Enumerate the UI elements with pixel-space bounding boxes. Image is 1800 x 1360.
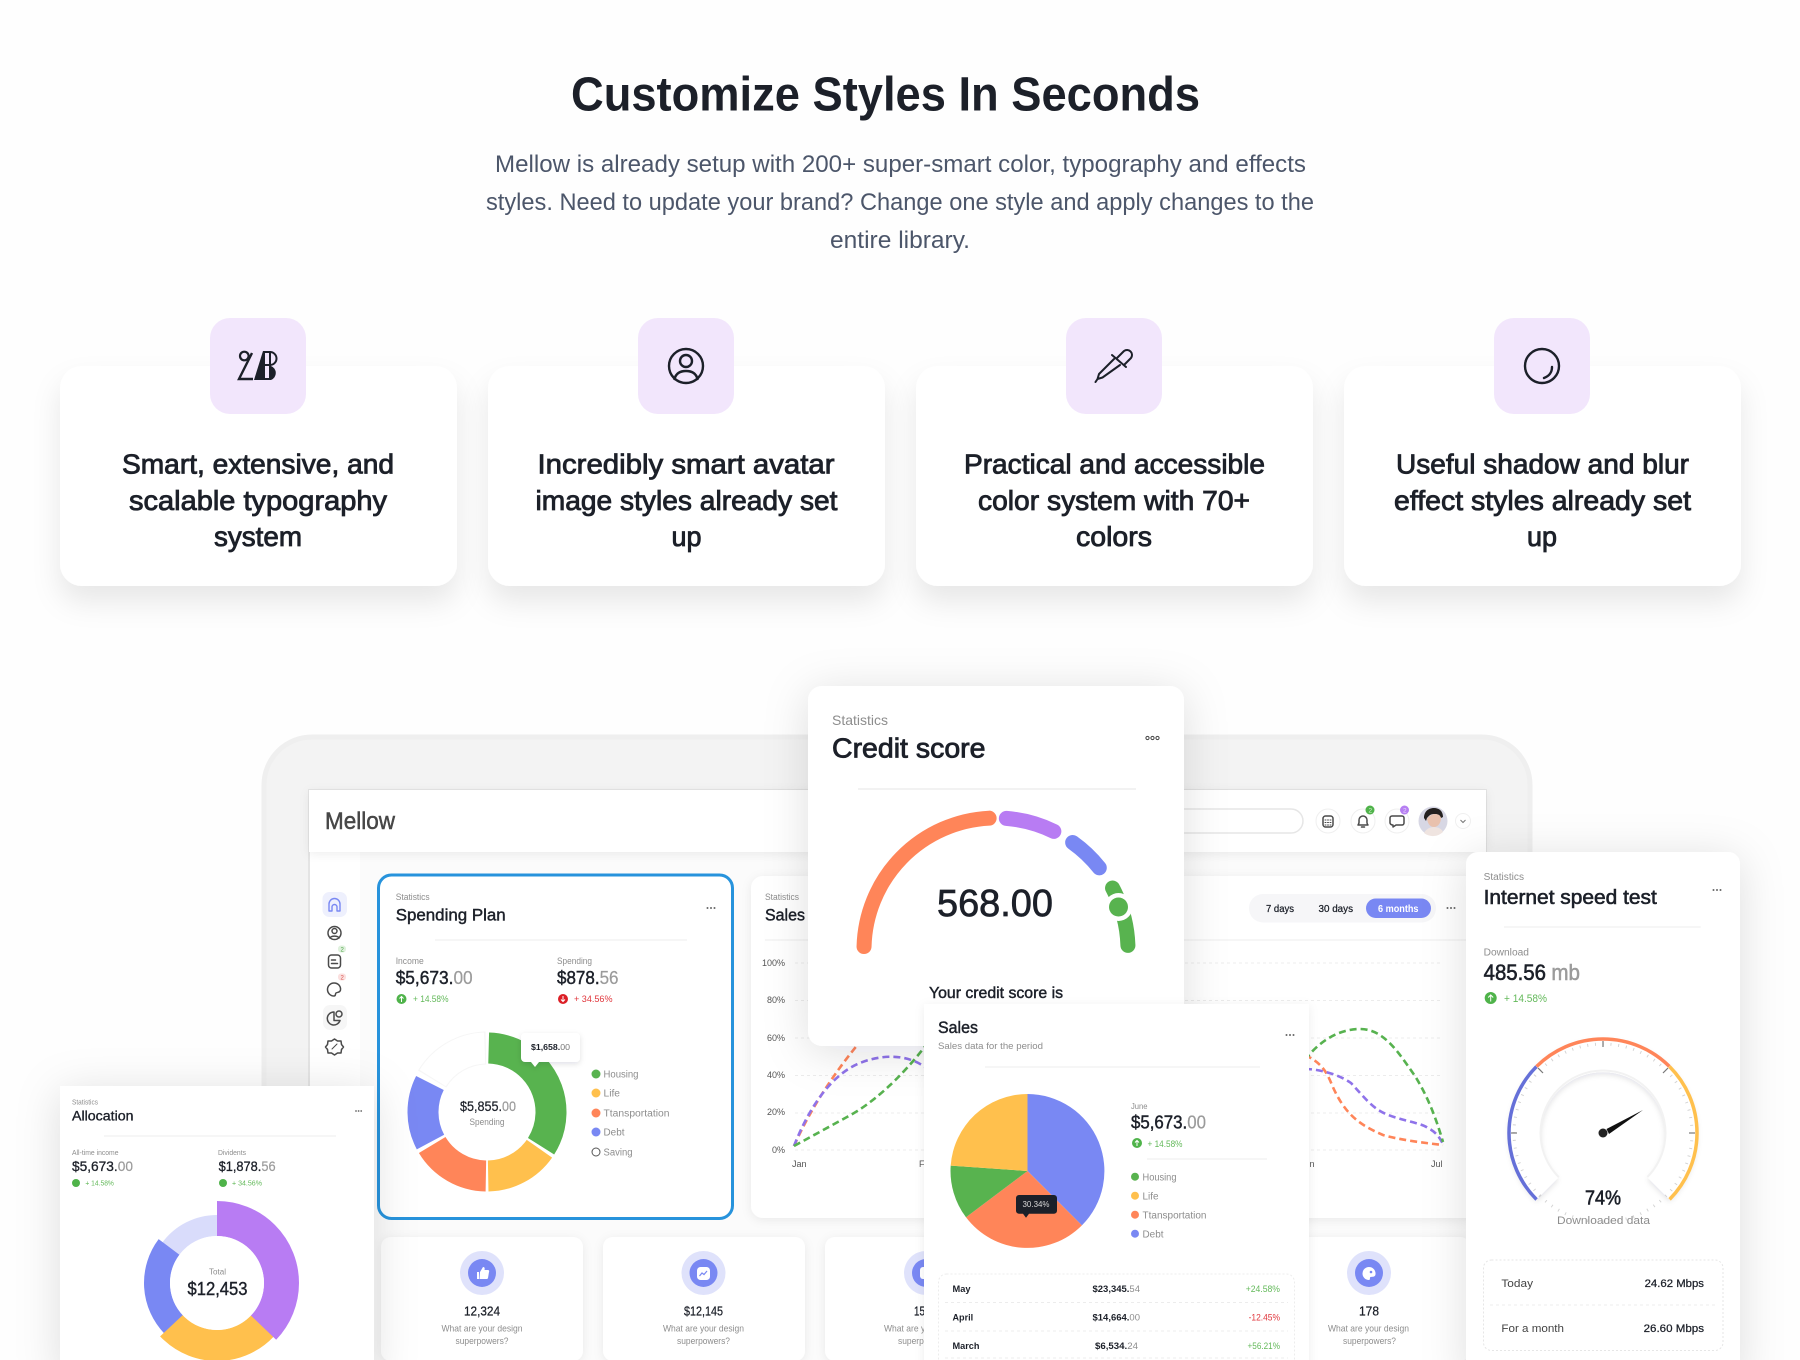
icon: chart bbox=[323, 1005, 347, 1030]
icon: home bbox=[322, 892, 347, 917]
icon: palette badge bbox=[1347, 1251, 1391, 1295]
panel heading: Allocation bbox=[72, 1109, 134, 1124]
y axis labels bbox=[762, 958, 785, 1155]
speed table: For a month bbox=[1501, 1323, 1564, 1335]
menu dots bbox=[1146, 736, 1159, 740]
card text: image styles already set bbox=[536, 485, 838, 516]
y axis labels: 80% bbox=[767, 995, 785, 1005]
avatar bbox=[1418, 806, 1448, 836]
monthly table: -12.45% bbox=[1249, 1312, 1280, 1324]
intro paragraph: styles. Need to update your brand? Change one style and apply changes to the bbox=[486, 189, 1314, 216]
intro paragraph bbox=[486, 151, 1314, 254]
card text bbox=[1394, 448, 1691, 552]
x axis labels: Jul bbox=[1431, 1159, 1443, 1169]
panel heading: Sales bbox=[938, 1018, 978, 1037]
card text: Incredibly smart avatar bbox=[538, 448, 834, 480]
menu dots bbox=[706, 907, 716, 909]
card text: system bbox=[214, 521, 302, 552]
time range tabs bbox=[1249, 894, 1436, 922]
card text: Useful shadow and blur bbox=[1396, 448, 1689, 480]
x axis labels: Jan bbox=[792, 1159, 807, 1169]
monthly table: +56.21% bbox=[1248, 1341, 1280, 1352]
feature card: avatar bbox=[488, 318, 885, 586]
time range tabs: 30 days bbox=[1318, 904, 1353, 915]
gauge bbox=[812, 766, 1180, 1134]
allocation donut chart bbox=[129, 1195, 305, 1360]
icon: thumbs up bbox=[460, 1251, 504, 1295]
stat: income bbox=[396, 956, 473, 1005]
menu dots bbox=[1286, 1034, 1294, 1036]
stat tile: likes: 12,324 bbox=[464, 1304, 500, 1318]
stat: spending: Spending bbox=[557, 956, 592, 966]
title: Customize Styles In Seconds bbox=[571, 68, 1200, 122]
panel: sales pie bbox=[924, 1004, 1309, 1360]
line: orange bbox=[794, 1030, 1443, 1146]
icon tile: circle bbox=[1494, 318, 1590, 414]
chevron button bbox=[1456, 814, 1470, 828]
intro paragraph: Mellow is already setup with 200+ super-smart color, typography and effects bbox=[495, 151, 1306, 178]
stat: income: Income bbox=[396, 956, 424, 966]
legend bbox=[592, 1070, 670, 1158]
monthly table: $14,664.00 bbox=[1092, 1312, 1140, 1324]
speed table: Today bbox=[1501, 1278, 1534, 1290]
stat tile: likes bbox=[381, 1237, 583, 1360]
donut centre value bbox=[188, 1268, 248, 1299]
icon: bell: 2 bbox=[1368, 808, 1372, 814]
legend: Ttansportation bbox=[604, 1108, 670, 1120]
legend: Life bbox=[604, 1088, 620, 1100]
panel heading: Sales bbox=[765, 906, 805, 925]
pie chart bbox=[951, 1094, 1104, 1248]
stat: download bbox=[1484, 948, 1580, 1005]
pie tooltip bbox=[1016, 1195, 1057, 1218]
time range tabs: 6 months bbox=[1378, 904, 1419, 915]
card text: up bbox=[1527, 521, 1557, 552]
card text bbox=[536, 448, 838, 552]
score caption: Your credit score is bbox=[929, 985, 1063, 1002]
icon: calendar bbox=[1316, 809, 1340, 833]
dashboard content background bbox=[360, 852, 1486, 1360]
gauge knob bbox=[1104, 893, 1132, 921]
stat: all-time income: All-time income bbox=[72, 1148, 118, 1157]
speed table bbox=[1484, 1260, 1723, 1350]
stat tile: palette: 178 bbox=[1359, 1304, 1379, 1318]
stat: all-time income: + 14.58% bbox=[85, 1179, 114, 1188]
panel label: Statistics bbox=[832, 712, 888, 728]
speed table: 24.62 Mbps bbox=[1645, 1278, 1705, 1290]
y axis labels: 60% bbox=[767, 1033, 785, 1043]
y axis labels: 100% bbox=[762, 958, 785, 968]
donut centre value bbox=[460, 1098, 516, 1127]
panel: sales line chart (background) bbox=[751, 876, 1481, 1218]
monthly table: May bbox=[952, 1284, 971, 1295]
stat: june: + 14.58% bbox=[1148, 1139, 1183, 1150]
menu dots bbox=[355, 1110, 362, 1112]
y axis labels: 40% bbox=[767, 1070, 785, 1080]
stat: spending bbox=[557, 956, 618, 1005]
card text: color system with 70+ bbox=[978, 485, 1250, 516]
brand name: Mellow bbox=[325, 808, 396, 835]
feature card: typography bbox=[60, 318, 457, 586]
stat tile: third (partly hidden) bbox=[825, 1237, 1027, 1360]
stat tile: palette: superpowers? bbox=[1343, 1336, 1396, 1347]
stat tile: revenue: $12,145 bbox=[684, 1304, 723, 1318]
stat: june: $5,673.00 bbox=[1131, 1113, 1206, 1133]
pie tooltip: 30.34% bbox=[1022, 1200, 1050, 1209]
menu dots bbox=[1446, 907, 1456, 909]
legend: Ttansportation bbox=[1142, 1210, 1206, 1222]
icon: palette: 2 bbox=[340, 976, 344, 982]
icon: chat: 2 bbox=[1403, 808, 1407, 814]
icon: user bbox=[328, 926, 341, 940]
icon tile: dropper bbox=[1066, 318, 1162, 414]
downloaded caption: Downloaded data bbox=[1557, 1215, 1651, 1227]
stat: dividends: + 34.56% bbox=[232, 1179, 262, 1188]
panel: allocation bbox=[60, 1086, 374, 1360]
stat tile: palette bbox=[1268, 1237, 1470, 1360]
monthly table: April bbox=[952, 1312, 973, 1324]
donut centre value: $12,453 bbox=[188, 1279, 248, 1299]
icon: chat bbox=[1385, 806, 1409, 833]
card text bbox=[964, 448, 1265, 552]
speedometer bbox=[1470, 1000, 1736, 1266]
panel label: Statistics bbox=[72, 1098, 98, 1107]
laptop frame bbox=[264, 737, 1530, 1360]
legend: Life bbox=[1142, 1192, 1159, 1202]
speed table: 26.60 Mbps bbox=[1644, 1323, 1705, 1335]
stat: all-time income: $5,673.00 bbox=[72, 1158, 133, 1174]
icon: trend bbox=[682, 1251, 726, 1295]
stat: dividends: $1,878.56 bbox=[219, 1158, 276, 1174]
donut centre value: Total bbox=[209, 1268, 226, 1277]
stat: spending: $878.56 bbox=[557, 968, 618, 988]
panel: credit score bbox=[808, 686, 1184, 1134]
x axis labels: Jun bbox=[1300, 1159, 1315, 1169]
stat: income: + 14.58% bbox=[413, 994, 449, 1005]
icon: settings bbox=[326, 1039, 344, 1055]
donut chart bbox=[398, 1023, 576, 1201]
icon: bell bbox=[1351, 806, 1375, 833]
search input bbox=[1100, 809, 1303, 833]
stat tile: revenue: What are your design bbox=[663, 1324, 744, 1334]
card text: effect styles already set bbox=[1394, 485, 1691, 516]
card text: up bbox=[672, 521, 702, 552]
stat: june bbox=[1131, 1101, 1206, 1150]
legend: Debt bbox=[604, 1128, 625, 1138]
x axis labels: Feb bbox=[919, 1159, 935, 1169]
stat: download: mb bbox=[1551, 960, 1580, 985]
card text: colors bbox=[1076, 521, 1152, 552]
legend: Housing bbox=[604, 1070, 638, 1080]
stat: all-time income bbox=[72, 1148, 133, 1188]
panel label: Statistics bbox=[1484, 872, 1524, 883]
stat: dividends: Dividents bbox=[218, 1148, 246, 1157]
monthly table: $6,534.24 bbox=[1095, 1341, 1138, 1352]
tooltip: $1,658.00 bbox=[531, 1042, 570, 1052]
stat tile: revenue bbox=[603, 1237, 805, 1360]
legend bbox=[1131, 1172, 1206, 1240]
downloaded value: 74% bbox=[1585, 1188, 1621, 1210]
menu dots bbox=[1712, 889, 1722, 891]
stat tile: third (partly hidden): superpowers? bbox=[898, 1336, 951, 1347]
stat: dividends bbox=[218, 1148, 276, 1188]
monthly table: $23,345.54 bbox=[1092, 1284, 1140, 1295]
panel heading: Internet speed test bbox=[1484, 887, 1657, 909]
card text: Practical and accessible bbox=[964, 448, 1265, 480]
needle bbox=[1598, 1110, 1643, 1138]
monthly table: March bbox=[952, 1341, 980, 1352]
feature card: shadow and blur bbox=[1344, 318, 1741, 586]
stat: download: + 14.58% bbox=[1504, 993, 1547, 1005]
monthly table: +24.58% bbox=[1246, 1284, 1280, 1295]
feature card: colour bbox=[916, 318, 1313, 586]
stat tile: third (partly hidden): What are your design bbox=[884, 1324, 965, 1334]
stat tile: revenue: superpowers? bbox=[677, 1336, 730, 1347]
icon: circle badge bbox=[904, 1251, 948, 1295]
icon: document: 2 bbox=[340, 948, 344, 954]
stat: download: 485.56 bbox=[1484, 960, 1546, 985]
line: purple bbox=[794, 1057, 1443, 1146]
tooltip bbox=[521, 1033, 580, 1067]
panel heading: Credit score bbox=[832, 733, 986, 764]
icon: document bbox=[328, 946, 346, 968]
y axis labels: 20% bbox=[767, 1107, 785, 1117]
legend: Housing bbox=[1142, 1172, 1176, 1184]
stat tile: palette: What are your design bbox=[1328, 1324, 1409, 1334]
card text: Smart, extensive, and bbox=[122, 448, 394, 480]
sidebar navigation bbox=[322, 892, 347, 1055]
line: green bbox=[794, 1029, 1443, 1146]
icon tile: typography bbox=[210, 318, 306, 414]
monthly table bbox=[938, 1274, 1294, 1360]
stat tile: third (partly hidden): 15,230 bbox=[914, 1304, 944, 1318]
card text bbox=[122, 448, 394, 552]
x axis labels bbox=[792, 1159, 1443, 1169]
legend: Saving bbox=[604, 1148, 632, 1158]
icon: palette bbox=[328, 974, 346, 996]
stat tile: likes: What are your design bbox=[442, 1324, 522, 1334]
stat: spending: + 34.56% bbox=[574, 994, 613, 1005]
card text: scalable typography bbox=[129, 485, 387, 516]
panel heading: Spending Plan bbox=[396, 906, 506, 925]
stat tile: likes: superpowers? bbox=[456, 1336, 508, 1347]
panel: spending plan bbox=[378, 875, 732, 1218]
time range tabs: 7 days bbox=[1266, 904, 1294, 915]
panel subtitle: Sales data for the period bbox=[938, 1041, 1043, 1052]
legend: Debt bbox=[1142, 1230, 1164, 1240]
stat: download: Download bbox=[1484, 948, 1529, 959]
y axis labels: 0% bbox=[772, 1145, 785, 1155]
panel label: Statistics bbox=[396, 892, 430, 902]
donut centre value: $5,855.00 bbox=[460, 1098, 516, 1114]
intro paragraph: entire library. bbox=[830, 227, 970, 254]
icon tile: avatar bbox=[638, 318, 734, 414]
panel: internet speed test bbox=[1466, 852, 1740, 1360]
panel label: Statistics bbox=[765, 892, 799, 902]
donut centre value: Spending bbox=[470, 1117, 504, 1127]
stat: june: June bbox=[1131, 1101, 1148, 1111]
stat: income: $5,673.00 bbox=[396, 968, 473, 988]
score value: 568.00 bbox=[937, 883, 1053, 925]
dashboard top bar bbox=[309, 790, 1486, 852]
